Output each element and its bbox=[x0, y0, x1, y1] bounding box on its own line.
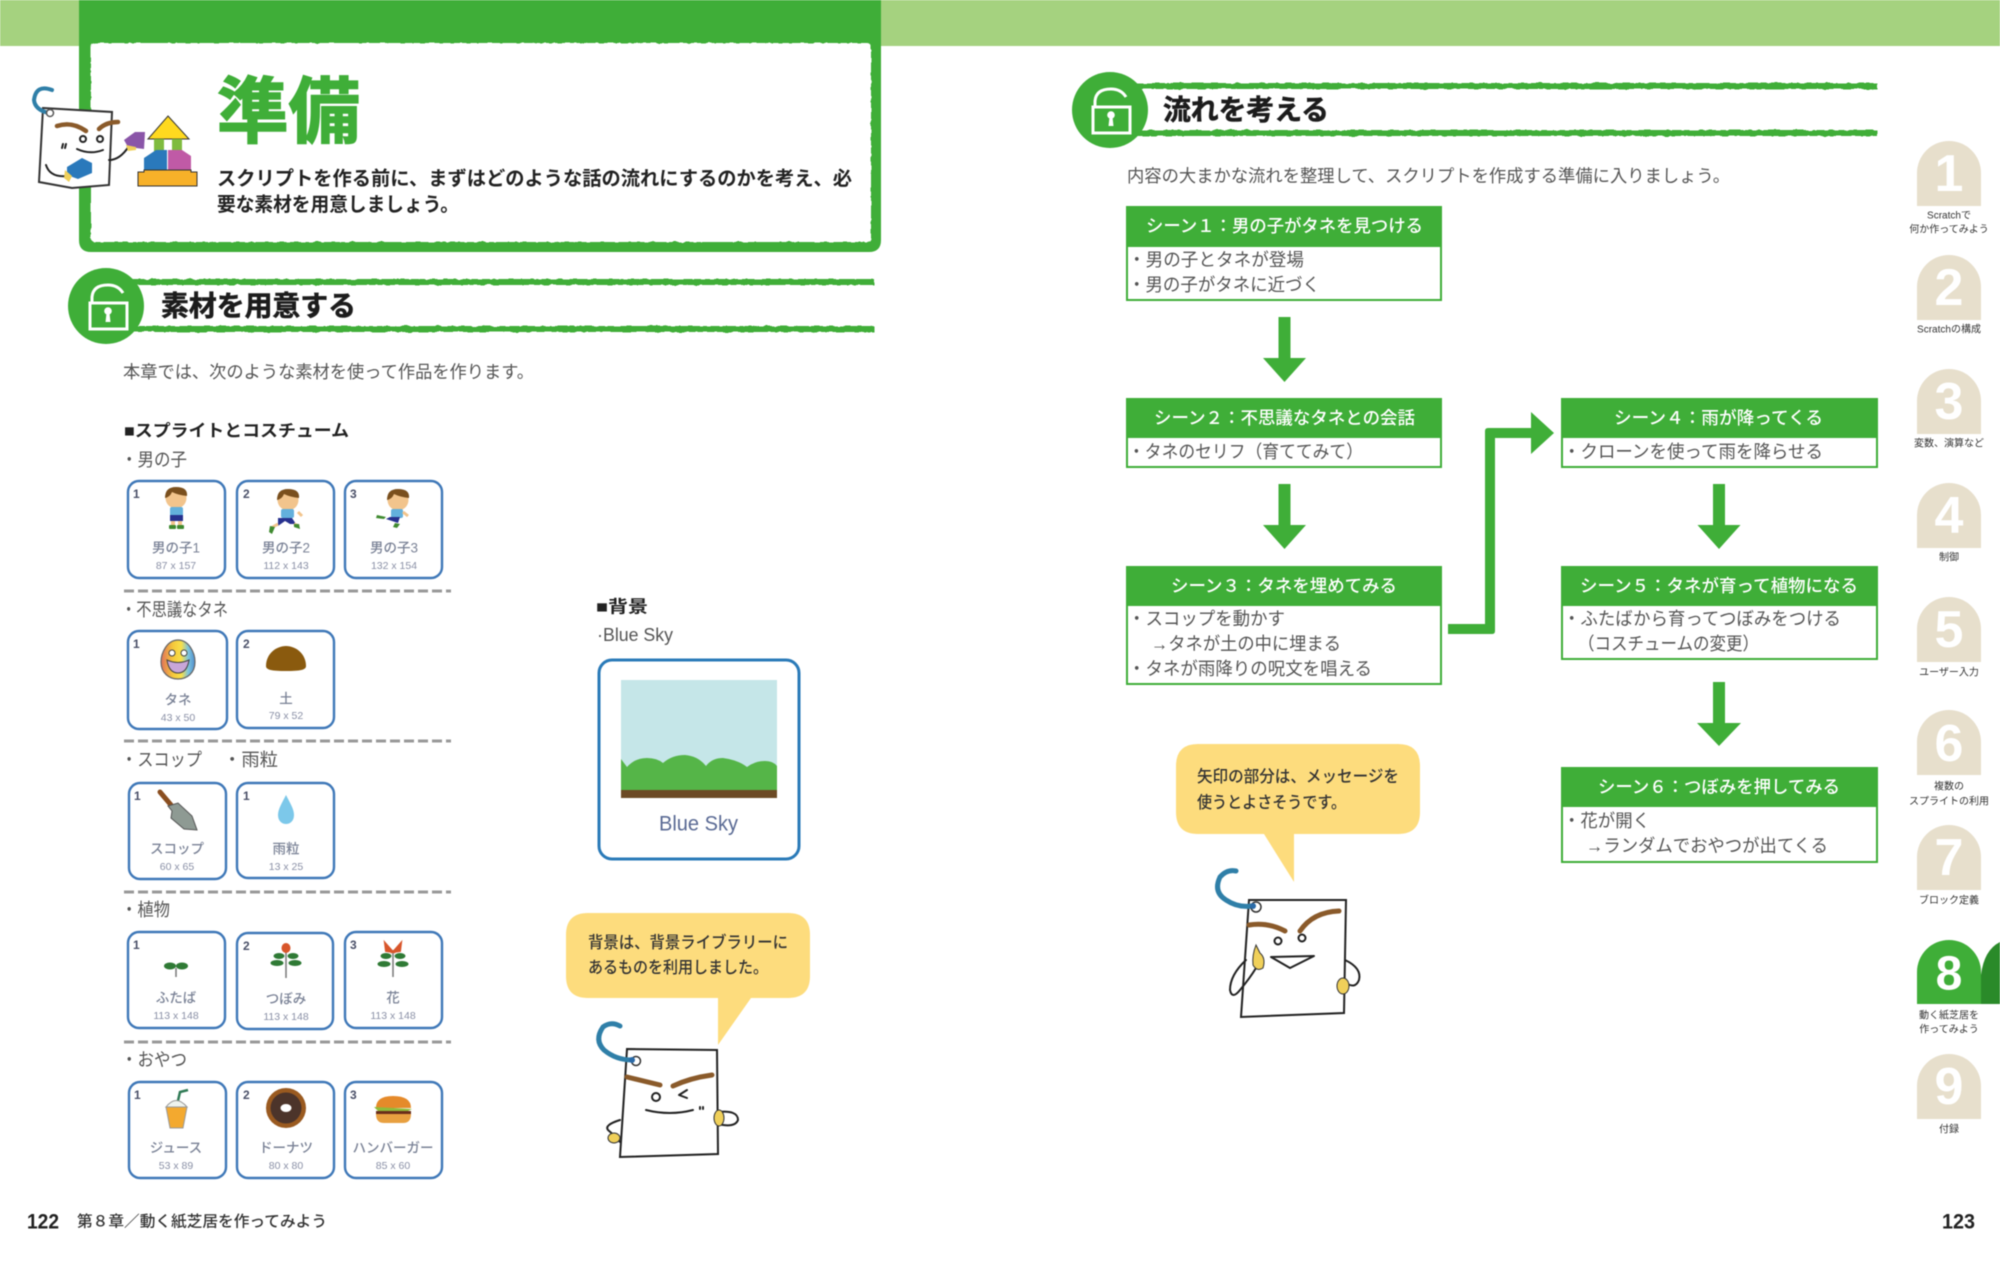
card: juice: 53 x 89 bbox=[159, 1160, 193, 1172]
callout: arrow note bbox=[1176, 744, 1420, 882]
label: scoop and raindrop: ・雨粒 bbox=[223, 750, 278, 770]
callout: background note bbox=[566, 913, 810, 1045]
sprite heading: ■スプライトとコスチューム bbox=[124, 422, 349, 440]
card: burger bbox=[345, 1082, 442, 1178]
dashed divider bbox=[124, 890, 451, 894]
tab 1 bbox=[1909, 141, 1989, 236]
panel: scene 4: ・クローンを使って雨を降らせる bbox=[1563, 442, 1823, 462]
panel frame bbox=[79, 0, 881, 252]
card: sprout: ふたば bbox=[156, 990, 197, 1006]
card: flower bbox=[345, 932, 442, 1028]
card: flower: 3 bbox=[350, 938, 357, 952]
panel: scene 1: ・男の子とタネが登場 bbox=[1128, 250, 1304, 270]
card: boy 1: 1 bbox=[133, 487, 140, 501]
panel: scene 1 bbox=[1127, 207, 1441, 300]
arrow: scene 1 to 2 bbox=[1263, 317, 1306, 382]
card: raindrop: 雨粒 bbox=[272, 842, 300, 856]
top band bbox=[0, 0, 2000, 46]
callout: background note: あるものを利用しました。 bbox=[588, 958, 768, 977]
panel: scene 6 bbox=[1562, 768, 1877, 862]
card: boy 1 bbox=[128, 481, 225, 578]
label: blue sky: · bbox=[597, 625, 603, 645]
tab 1: Scratchで bbox=[1927, 210, 1971, 222]
label: scoop and raindrop: ・スコップ bbox=[121, 750, 202, 770]
dashed divider bbox=[124, 590, 451, 592]
card: juice: 1 bbox=[134, 1088, 141, 1102]
card: burger: 3 bbox=[350, 1088, 357, 1102]
tab 3 bbox=[1914, 369, 1984, 450]
tab 6: 複数の bbox=[1934, 780, 1964, 792]
card: bud: 2 bbox=[243, 939, 250, 953]
card: juice: ジュース bbox=[150, 1140, 202, 1156]
card: donut: ドーナツ bbox=[259, 1140, 313, 1156]
tab 5: 5 bbox=[1935, 601, 1963, 659]
icon: paper character with blocks bbox=[34, 88, 197, 188]
card: scoop: スコップ bbox=[150, 842, 204, 856]
card: bud: 113 x 148 bbox=[263, 1011, 309, 1023]
label: blue sky: Blue Sky bbox=[603, 625, 673, 645]
title panel bbox=[79, 0, 881, 252]
panel: scene 4 bbox=[1562, 399, 1877, 467]
card: raindrop: 13 x 25 bbox=[269, 861, 303, 873]
card: boy 3: 3 bbox=[350, 487, 357, 501]
tab 8: current chapter: 8 bbox=[1936, 948, 1962, 1000]
tab 2 bbox=[1917, 255, 1981, 336]
card: bud bbox=[237, 933, 333, 1029]
arrow: scene 5 to 6 bbox=[1697, 682, 1741, 746]
panel: scene 3: ・スコップを動かす bbox=[1128, 609, 1285, 629]
card: scoop: 1 bbox=[134, 789, 141, 803]
dashed divider bbox=[124, 740, 451, 742]
panel: scene 5: （コスチュームの変更） bbox=[1578, 634, 1759, 654]
card: juice bbox=[129, 1082, 226, 1178]
tab 4: 制御 bbox=[1939, 550, 1959, 564]
icon: lock bbox=[68, 268, 144, 344]
backdrop name: Blue Sky bbox=[659, 812, 738, 836]
background heading: ■背景 bbox=[596, 598, 648, 616]
callout: background note: 背景は、背景ライブラリーに bbox=[588, 932, 788, 952]
tab 9 bbox=[1917, 1054, 1981, 1136]
backdrop image bbox=[621, 680, 777, 798]
tab 7 bbox=[1917, 825, 1981, 906]
card: donut bbox=[237, 1082, 334, 1178]
card: flower: 花 bbox=[386, 990, 400, 1006]
card: bud: つぼみ bbox=[266, 992, 306, 1006]
card: seed: 43 x 50 bbox=[161, 712, 195, 724]
icon: pointing paper character bbox=[1218, 871, 1359, 1017]
tab 5 bbox=[1917, 597, 1981, 678]
card: boy 2: 112 x 143 bbox=[263, 560, 309, 572]
label: snacks: ・おやつ bbox=[121, 1050, 187, 1070]
intro text: スクリプトを作る前に、まずはどのような話の流れにするのかを考え、必 bbox=[217, 168, 852, 190]
arrow: scene 3 to 4 bbox=[1448, 412, 1554, 634]
card: boy 2: 男の子2 bbox=[262, 540, 310, 556]
tab 7: ブロック定義 bbox=[1919, 894, 1979, 906]
panel: scene 2: ・タネのセリフ（育ててみて） bbox=[1128, 442, 1363, 462]
heading text: 流れを考える bbox=[1163, 94, 1329, 126]
card: boy 2: 2 bbox=[243, 487, 250, 501]
tab 3: 3 bbox=[1935, 373, 1963, 431]
tab 8: current chapter bbox=[1917, 940, 2000, 1036]
tab 1: 1 bbox=[1935, 145, 1963, 203]
card: donut: 2 bbox=[243, 1088, 250, 1102]
panel: scene 6: →ランダムでおやつが出てくる bbox=[1586, 836, 1828, 856]
panel: scene 1: ・男の子がタネに近づく bbox=[1128, 275, 1320, 295]
panel: scene 2 bbox=[1127, 399, 1441, 467]
panel: scene 5: ・ふたばから育ってつぼみをつける bbox=[1563, 609, 1841, 629]
icon: winking paper character bbox=[599, 1024, 738, 1157]
section heading: materials bbox=[68, 268, 874, 344]
card: donut: 80 x 80 bbox=[269, 1160, 303, 1172]
panel: scene 1: シーン１：男の子がタネを見つける bbox=[1146, 216, 1423, 236]
panel: scene 3: →タネが土の中に埋まる bbox=[1151, 634, 1341, 654]
panel: scene 5: シーン５：タネが育って植物になる bbox=[1580, 576, 1858, 596]
card: burger: ハンバーガー bbox=[352, 1140, 434, 1156]
heading text: 素材を用意する bbox=[161, 290, 356, 322]
card: soil bbox=[237, 631, 334, 728]
card: soil: 土 bbox=[279, 692, 293, 706]
card: raindrop bbox=[237, 783, 334, 878]
tab 8: current chapter: 動く紙芝居を bbox=[1919, 1008, 1979, 1022]
card: burger: 85 x 60 bbox=[376, 1160, 410, 1172]
materials intro text: 本章では、次のような素材を使って作品を作ります。 bbox=[123, 362, 534, 382]
card: sprout: 1 bbox=[133, 938, 140, 952]
tab 6: 6 bbox=[1935, 715, 1963, 773]
card: boy 3: 男の子3 bbox=[370, 540, 418, 556]
label: plants: ・植物 bbox=[121, 899, 170, 920]
panel: scene 2: シーン２：不思議なタネとの会話 bbox=[1154, 408, 1415, 428]
label: scoop and raindrop bbox=[121, 750, 278, 770]
card: soil: 2 bbox=[243, 637, 250, 651]
panel: scene 6: シーン６：つぼみを押してみる bbox=[1598, 777, 1840, 797]
tab 8: current chapter: 作ってみよう bbox=[1919, 1024, 1979, 1036]
card: flower: 113 x 148 bbox=[370, 1010, 416, 1022]
label: boy: ・男の子 bbox=[121, 450, 187, 470]
card: scoop: 60 x 65 bbox=[160, 861, 194, 873]
tab 6: スプライトの利用 bbox=[1909, 796, 1989, 808]
label: mysterious seed: ・不思議なタネ bbox=[121, 600, 228, 620]
card: raindrop: 1 bbox=[243, 789, 250, 803]
tab 4: 4 bbox=[1935, 487, 1964, 545]
card: sprout: 113 x 148 bbox=[153, 1010, 199, 1022]
card: boy 3: 132 x 154 bbox=[371, 560, 417, 572]
footer: right page number: 123 bbox=[1942, 1210, 1975, 1234]
icon: lock bbox=[1072, 72, 1148, 148]
callout: arrow note: 使うとよさそうです。 bbox=[1197, 793, 1346, 812]
intro text: 要な素材を用意しましょう。 bbox=[217, 194, 459, 216]
callout: arrow note: 矢印の部分は、メッセージを bbox=[1197, 767, 1399, 786]
tab 1: 何か作ってみよう bbox=[1909, 222, 1989, 236]
card: boy 1: 男の子1 bbox=[152, 540, 200, 556]
card: seed: タネ bbox=[164, 692, 192, 708]
panel: scene 6: ・花が開く bbox=[1563, 811, 1650, 831]
title: 準備 bbox=[217, 73, 360, 153]
intro text bbox=[217, 168, 852, 216]
tab 6 bbox=[1909, 710, 1989, 808]
card: scoop bbox=[129, 783, 226, 879]
arrow: scene 4 to 5 bbox=[1698, 484, 1740, 549]
tab 3: 変数、演算など bbox=[1914, 436, 1984, 450]
tab 5: ユーザー入力 bbox=[1919, 666, 1979, 678]
dashed divider bbox=[124, 1040, 451, 1044]
panel: scene 5 bbox=[1562, 567, 1877, 659]
tab 9: 9 bbox=[1935, 1058, 1963, 1116]
panel: scene 3: シーン３：タネを埋めてみる bbox=[1171, 576, 1397, 596]
heading rules bbox=[130, 279, 874, 332]
tab 7: 7 bbox=[1935, 829, 1963, 887]
arrow: scene 2 to 3 bbox=[1263, 484, 1306, 549]
card: seed: 1 bbox=[133, 637, 140, 651]
card: boy 3 bbox=[345, 481, 442, 578]
card: blue sky backdrop bbox=[599, 660, 799, 859]
card: seed bbox=[128, 631, 227, 729]
card: boy 1: 87 x 157 bbox=[156, 560, 196, 572]
tab 2: 2 bbox=[1935, 259, 1963, 317]
tab 9: 付録 bbox=[1939, 1122, 1959, 1136]
card: boy 2 bbox=[237, 481, 334, 578]
card: soil: 79 x 52 bbox=[269, 710, 303, 722]
panel: scene 4: シーン４：雨が降ってくる bbox=[1614, 408, 1823, 428]
tab 2: Scratchの構成 bbox=[1917, 322, 1981, 336]
card: sprout bbox=[128, 932, 225, 1028]
panel: scene 3: ・タネが雨降りの呪文を唱える bbox=[1128, 659, 1372, 679]
tab 4 bbox=[1917, 483, 1981, 564]
footer: chapter name: 第８章／動く紙芝居を作ってみよう bbox=[77, 1212, 327, 1230]
panel: scene 3 bbox=[1127, 567, 1441, 684]
section heading: flow bbox=[1072, 72, 1877, 148]
flow intro text: 内容の大まかな流れを整理して、スクリプトを作成する準備に入りましょう。 bbox=[1127, 166, 1730, 186]
footer: left page number: 122 bbox=[27, 1210, 59, 1234]
heading rules bbox=[1135, 83, 1877, 136]
